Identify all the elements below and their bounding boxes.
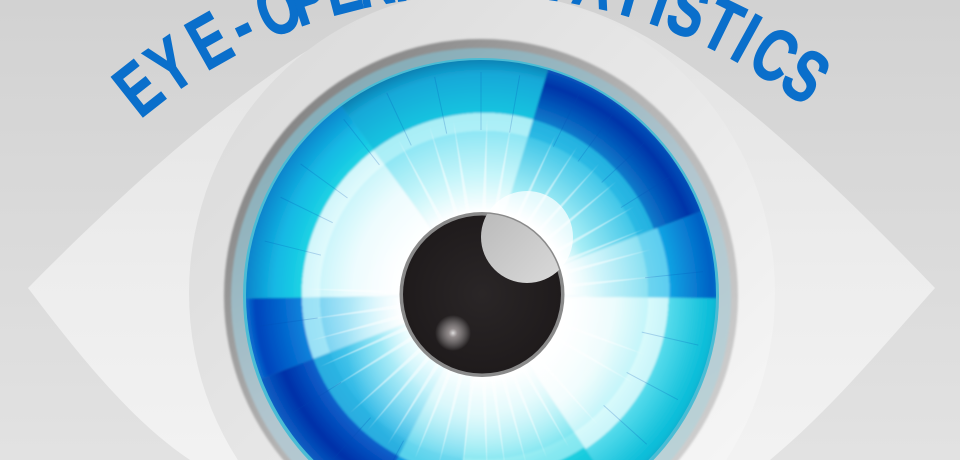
pale reflection circle <box>481 191 573 283</box>
sector: top teal <box>340 60 549 230</box>
eyelid ring <box>189 0 775 460</box>
title on arc: E <box>99 45 178 132</box>
iris <box>246 60 716 460</box>
title on arc: Y <box>132 21 208 109</box>
title on arc: C <box>736 10 813 100</box>
sector: lower left dark blue <box>261 323 444 460</box>
dark iris fibres <box>260 72 703 460</box>
title on arc: S <box>767 32 844 120</box>
sector: lower right cyan <box>481 295 762 460</box>
title on arc <box>99 0 844 132</box>
sector: left blue <box>246 294 406 380</box>
pupil grey highlight <box>481 214 559 283</box>
sector: right blue <box>559 210 716 300</box>
sector: upper left cyan <box>246 106 434 300</box>
pupil sparkle <box>435 315 471 351</box>
sector: bottom cyan <box>462 363 594 460</box>
white glow under pupil <box>352 300 571 460</box>
iris outer rim <box>224 39 738 460</box>
iris rays <box>304 118 657 460</box>
pupil <box>400 212 564 377</box>
sector: upper right dark blue <box>504 70 701 266</box>
sector: bottom mid blue <box>396 368 472 460</box>
title on arc: I <box>720 0 773 78</box>
